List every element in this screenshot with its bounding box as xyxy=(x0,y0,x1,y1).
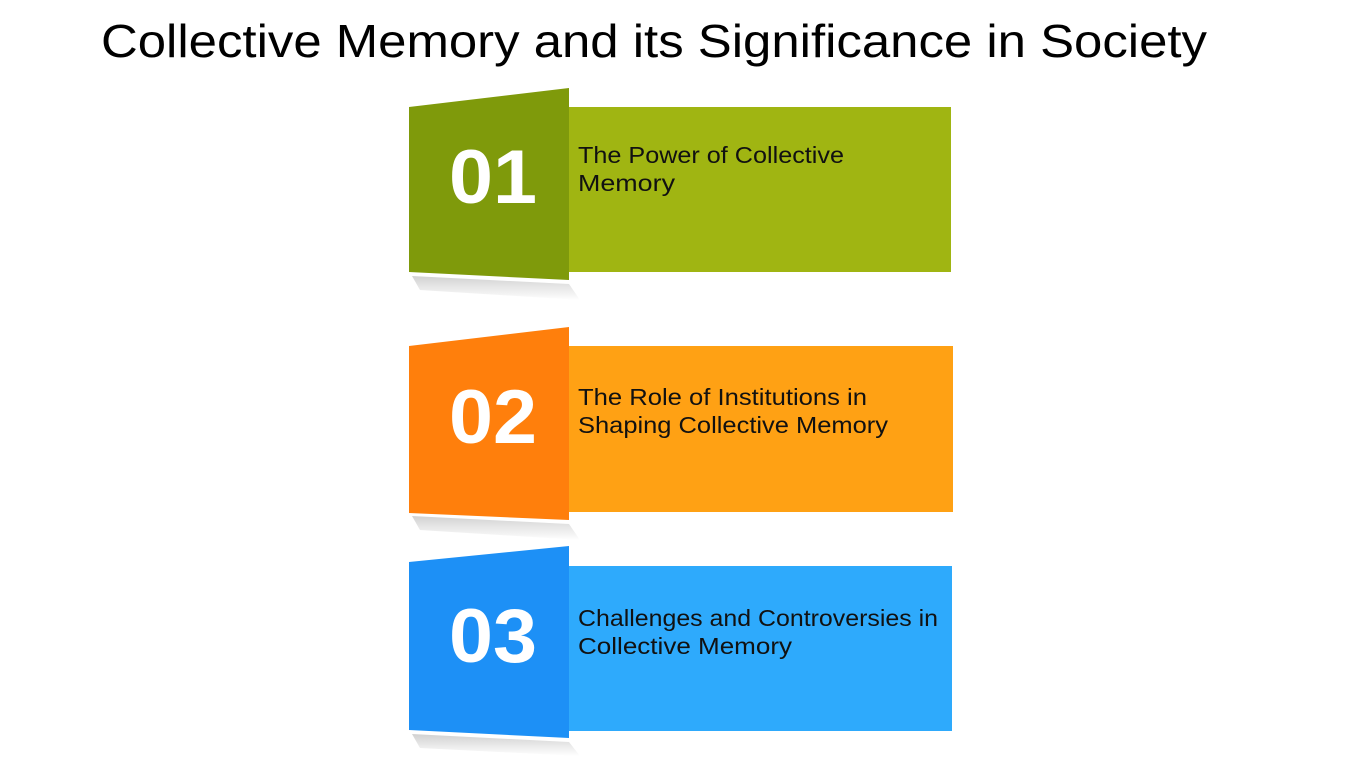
number 01: 01 xyxy=(449,135,537,220)
title: Collective Memory and its Significance in Society xyxy=(101,15,1207,67)
label 03: Collective Memory xyxy=(578,633,793,659)
label 01: The Power of Collective xyxy=(578,142,844,168)
number 03: 03 xyxy=(449,594,537,679)
label 01: Memory xyxy=(578,170,676,196)
number 02: 02 xyxy=(449,375,537,460)
panel: 02 text band xyxy=(569,346,953,512)
item 02 xyxy=(409,327,953,540)
label 02: The Role of Institutions in xyxy=(578,384,867,410)
item 01 xyxy=(409,88,951,300)
panel: 03 text band xyxy=(569,566,952,731)
item 03 xyxy=(409,546,952,756)
panel: 02 number tab xyxy=(409,327,569,520)
panel: 01 number tab xyxy=(409,88,569,280)
panel: 01 text band xyxy=(569,107,951,272)
panel: 03 number tab xyxy=(409,546,569,738)
label 02: Shaping Collective Memory xyxy=(578,412,889,438)
label 03: Challenges and Controversies in xyxy=(578,605,938,631)
